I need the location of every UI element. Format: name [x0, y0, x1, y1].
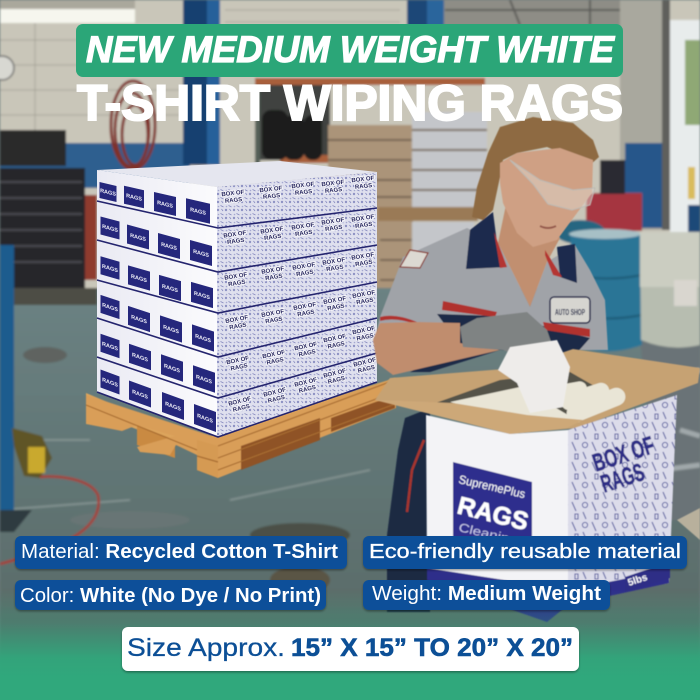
- AUTO SHOP badge: AUTO SHOP: [555, 308, 585, 317]
- open cardboard box: [375, 340, 700, 622]
- BOX OF RAGS text on right face: RAGS: [297, 309, 315, 318]
- pill: weight: Weight: Medium Weight: [372, 583, 601, 605]
- workshop floor: [0, 288, 700, 700]
- BOX OF RAGS text on right face: RAGS: [355, 183, 373, 191]
- BOX OF RAGS text on right face: BOX OF: [322, 257, 346, 267]
- wall clock: [0, 56, 14, 80]
- BOX OF RAGS text on right face: RAGS: [357, 365, 376, 375]
- wooden pallet: [86, 378, 396, 478]
- BOX OF RAGS text on right face: RAGS: [230, 363, 248, 373]
- yellow jack: [12, 428, 52, 478]
- blue barrel: [570, 235, 642, 352]
- BOX OF RAGS text on right face: BOX OF: [352, 326, 376, 336]
- BOX OF RAGS text on right face: RAGS: [356, 297, 374, 306]
- BOX OF RAGS text on right face: BOX OF: [323, 368, 347, 380]
- bare forearm: [373, 322, 500, 375]
- red shirt stripes: [380, 301, 590, 337]
- RAGS labels on left face: RAGS: [165, 401, 181, 413]
- RAGS labels on left face: RAGS: [162, 284, 178, 294]
- BOX OF RAGS text on right face: BOX OF: [223, 230, 247, 240]
- BOX OF RAGS text on right face: RAGS: [325, 225, 343, 233]
- BOX OF RAGS text on right face: RAGS: [227, 238, 245, 246]
- BOX OF RAGS text on right face: BOX OF: [323, 296, 347, 306]
- BOX OF RAGS text on right face: BOX OF: [351, 214, 375, 224]
- BOX OF RAGS text on right face: RAGS: [355, 222, 373, 230]
- red hose on floor: [0, 476, 99, 564]
- BOX OF RAGS text on right face: BOX OF: [221, 190, 245, 198]
- blue lift posts: [183, 0, 220, 165]
- pill: material: [15, 536, 347, 569]
- BOX OF RAGS text on right face: RAGS: [264, 234, 282, 242]
- lower body navy work pants: [387, 410, 430, 612]
- pill: color: [15, 580, 326, 610]
- BOX OF RAGS text on right face: RAGS: [266, 357, 284, 367]
- BOX OF RAGS text on right face: RAGS: [356, 333, 374, 343]
- BOX OF RAGS text on right face: BOX OF: [352, 290, 376, 300]
- box front face: [426, 415, 568, 602]
- navy straps: [97, 201, 377, 437]
- BOX OF RAGS text on right face: RAGS: [298, 349, 316, 359]
- sacks: [328, 125, 413, 310]
- RAGS labels on left face: RAGS: [196, 374, 212, 386]
- pill: eco-friendly: [363, 536, 687, 569]
- RAGS labels on left face: RAGS: [194, 291, 210, 301]
- RAGS labels on left face: [100, 182, 216, 432]
- pallet of boxed rags: [86, 161, 396, 478]
- right wall: [620, 0, 670, 230]
- front cardboard flap: [375, 400, 583, 434]
- BOX OF RAGS text on right face: BOX OF: [228, 396, 252, 408]
- BOX OF RAGS text on right face: BOX OF: [321, 180, 345, 188]
- cream rolled rags: [450, 380, 628, 428]
- BOX OF RAGS text on right face: RAGS: [267, 395, 286, 405]
- RAGS labels on left face: RAGS: [164, 363, 180, 375]
- BOX OF RAGS text on right face: RAGS: [229, 322, 247, 331]
- BOX OF RAGS text on right face: RAGS: [355, 260, 373, 268]
- shoulder patch: [400, 250, 428, 268]
- white barrel: [640, 232, 700, 348]
- navy torso band: [410, 314, 590, 372]
- BOX OF RAGS text on right face: RAGS: [295, 189, 313, 197]
- RAGS labels on left face: RAGS: [126, 193, 142, 203]
- navy RAGS label: SupremePlus: [457, 472, 527, 501]
- BOX OF RAGS text on right face: BOX OF: [293, 302, 317, 312]
- BOX OF RAGS text on right face: BOX OF: [261, 266, 285, 276]
- BOX OF RAGS text on right face: BOX OF: [260, 226, 284, 236]
- BOX OF RAGS text on right face: BOX OF: [291, 222, 315, 232]
- grey shirt: [375, 228, 608, 365]
- RAGS labels on left face: RAGS: [132, 352, 148, 364]
- white rag pulled from box: [498, 340, 570, 413]
- BOX OF RAGS text on right face: BOX OF: [259, 186, 283, 194]
- pill: color: Color: White (No Dye / No Print): [20, 585, 321, 607]
- RAGS labels on left face: RAGS: [195, 334, 211, 345]
- RAGS labels on left face: RAGS: [157, 200, 173, 210]
- mouth: [540, 226, 556, 228]
- rear blue barrel: [555, 220, 605, 244]
- AUTO SHOP badge: [550, 297, 590, 323]
- navy collar right: [557, 244, 577, 283]
- size callout: 15” X 15” TO 20” X 20”: [291, 634, 573, 662]
- RAGS labels on left face: RAGS: [190, 207, 206, 217]
- BOX OF RAGS text on right face: RAGS: [325, 187, 343, 195]
- RAGS labels on left face: RAGS: [102, 264, 118, 274]
- BOX OF RAGS text on right face: BOX OF: [262, 350, 286, 360]
- green title banner: NEW MEDIUM WEIGHT WHITE: [86, 29, 615, 70]
- pill: eco-friendly: Eco-friendly reusable material: [369, 541, 681, 563]
- BOX OF RAGS on box side: [589, 431, 658, 499]
- storage rack: [255, 78, 485, 85]
- BOX OF RAGS text on right face: RAGS: [232, 404, 251, 414]
- BOX OF RAGS text on right face: BOX OF: [294, 342, 318, 352]
- red air hose: [111, 81, 155, 169]
- main heading: T-SHIRT WIPING RAGS: [77, 75, 623, 131]
- RAGS labels on left face: RAGS: [131, 274, 147, 284]
- BOX OF RAGS text on right face: RAGS: [327, 303, 345, 312]
- BOX OF RAGS text on right face: BOX OF: [323, 334, 347, 344]
- BOX OF RAGS text on right face: RAGS: [228, 280, 246, 288]
- BOX OF RAGS text on right face: RAGS: [225, 197, 243, 205]
- BOX OF RAGS text on right face: BOX OF: [321, 217, 345, 227]
- box weight tag: [625, 562, 670, 592]
- garage door: [444, 0, 622, 30]
- right face of stack: [217, 172, 377, 437]
- BOX OF RAGS text on right face: RAGS: [327, 341, 345, 351]
- BOX OF RAGS on box side: BOX OF: [589, 431, 658, 477]
- size callout: Size Approx.: [127, 634, 285, 662]
- BOX OF RAGS text on right face: BOX OF: [353, 357, 377, 369]
- BOX OF RAGS text on right face: BOX OF: [294, 377, 318, 389]
- BOX OF RAGS on box side: RAGS: [597, 458, 648, 499]
- BOX OF RAGS text on right face: RAGS: [265, 316, 283, 325]
- RAGS labels on left face: RAGS: [132, 389, 148, 401]
- RAGS labels on left face: RAGS: [161, 242, 177, 252]
- tray on right floor: [677, 508, 700, 540]
- tool chest: [0, 168, 85, 288]
- red collar trim: [494, 232, 562, 277]
- BOX OF RAGS text on right face: BOX OF: [351, 176, 375, 184]
- navy RAGS label: Cleaning: [457, 520, 519, 547]
- BOX OF RAGS text on right face: BOX OF: [261, 309, 285, 319]
- RAGS labels on left face: RAGS: [102, 224, 118, 234]
- neck: [498, 200, 560, 307]
- RAGS labels on left face: RAGS: [102, 377, 118, 389]
- RAGS labels on left face: RAGS: [197, 413, 213, 425]
- navy RAGS label: RAGS: [455, 492, 531, 536]
- RAGS labels on left face: RAGS: [131, 315, 147, 326]
- BOX OF RAGS text on right face: RAGS: [298, 385, 317, 395]
- RAGS labels on left face: RAGS: [102, 303, 118, 314]
- BOX OF RAGS text on right face: RAGS: [265, 274, 283, 282]
- left face of stack: [97, 170, 217, 437]
- BOX OF RAGS text on right face: BOX OF: [225, 315, 249, 325]
- BOX OF RAGS text on right face: RAGS: [327, 376, 346, 386]
- RAGS labels on left face: RAGS: [102, 341, 118, 353]
- BOX OF RAGS text on right face: RAGS: [295, 230, 313, 238]
- size callout: [122, 627, 579, 671]
- RAGS labels on left face: RAGS: [130, 233, 146, 243]
- pill: material: Material: Recycled Cotton T-Shirt: [21, 541, 338, 563]
- bottom green gradient: [0, 590, 700, 700]
- box interior and rear flaps: [375, 349, 700, 434]
- RAGS labels on left face: RAGS: [163, 325, 179, 336]
- BOX OF RAGS text on right face: [221, 176, 379, 415]
- grey glove: [460, 312, 555, 362]
- RAGS labels on left face: RAGS: [193, 249, 209, 259]
- tires: [262, 110, 322, 160]
- BOX OF RAGS text on right face: RAGS: [326, 265, 344, 273]
- BOX OF RAGS text on right face: BOX OF: [263, 387, 287, 399]
- top of stack: [97, 161, 377, 187]
- BOX OF RAGS text on right face: BOX OF: [291, 182, 315, 190]
- red machine: [586, 193, 642, 231]
- navy RAGS label: [453, 462, 532, 547]
- face: [500, 148, 593, 247]
- safety glasses: [510, 160, 595, 210]
- box right face: [568, 395, 677, 602]
- pill: weight: [363, 580, 610, 610]
- BOX OF RAGS text on right face: BOX OF: [351, 252, 375, 262]
- blue column: [0, 245, 14, 520]
- box weight tag: 5lbs: [627, 572, 649, 589]
- BOX OF RAGS text on right face: BOX OF: [292, 262, 316, 272]
- RAGS labels on left face: RAGS: [100, 188, 116, 198]
- BOX OF RAGS text on right face: BOX OF: [226, 356, 250, 366]
- navy collar left: [466, 212, 507, 269]
- BOX OF RAGS text on right face: RAGS: [296, 270, 314, 278]
- worker in grey uniform: [373, 117, 608, 612]
- BOX OF RAGS text on right face: RAGS: [263, 193, 281, 201]
- BOX OF RAGS text on right face: BOX OF: [224, 272, 248, 282]
- ponytail and hair: [472, 117, 599, 220]
